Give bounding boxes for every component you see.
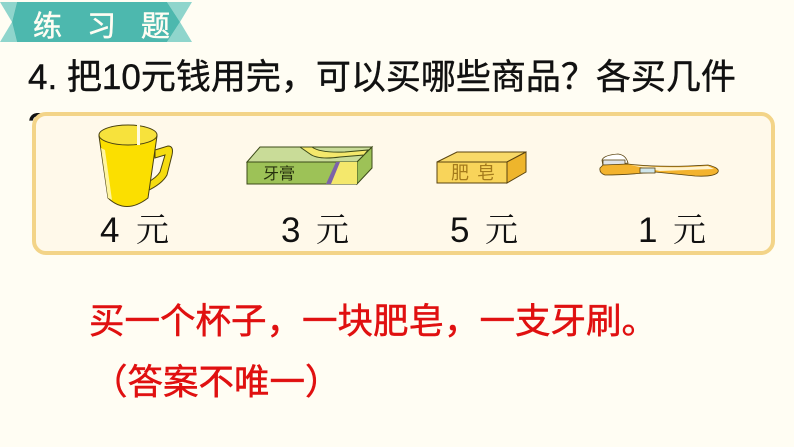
title banner: 练习题: 习 <box>87 11 116 43</box>
icon: soap: 肥 <box>451 163 469 183</box>
price: 1 元 <box>638 204 706 251</box>
price: 3 元: 元 <box>316 204 349 251</box>
price: 4 元 <box>100 204 169 251</box>
price: 5 元 <box>450 204 518 251</box>
question text <box>28 58 736 146</box>
question text: 4. 把10元钱用完，可以买哪些商品？各买几件 <box>28 58 736 97</box>
answer text: 买一个杯子，一块肥皂，一支牙刷。 <box>89 301 657 341</box>
price: 3 元: 3 <box>281 211 300 250</box>
title banner: 练习题: 练 <box>33 10 62 43</box>
price: 1 元: 元 <box>673 204 706 251</box>
price: 5 元: 元 <box>485 204 518 251</box>
icon: toothbrush <box>600 154 718 176</box>
icon: soap <box>437 152 526 183</box>
title banner: 练习题 <box>0 2 192 43</box>
price: 5 元: 5 <box>450 211 469 250</box>
answer note: （答案不唯一） <box>92 362 341 402</box>
icon: soap: 皂 <box>477 163 495 183</box>
icon: yellow cup <box>99 125 172 206</box>
price: 3 元 <box>281 204 349 251</box>
price: 4 元: 元 <box>136 204 169 251</box>
question text: ? <box>28 107 47 146</box>
icon: toothpaste box: 牙膏 <box>263 164 295 183</box>
icon: toothpaste box <box>247 147 372 184</box>
title banner: 练习题: 题 <box>141 11 170 43</box>
price: 4 元: 4 <box>100 211 119 250</box>
price: 1 元: 1 <box>638 211 657 250</box>
panel: goods <box>34 114 773 253</box>
